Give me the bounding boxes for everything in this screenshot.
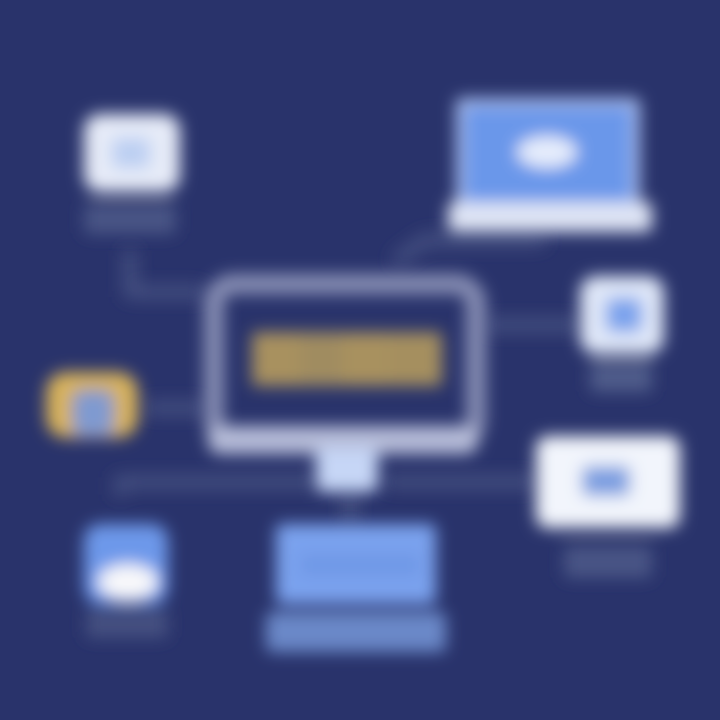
caption placeholder bbox=[84, 204, 176, 234]
caption placeholder bbox=[86, 610, 168, 638]
caption placeholder bbox=[590, 362, 652, 392]
central monitor bbox=[208, 284, 478, 492]
monitor stand bbox=[316, 448, 378, 492]
monitor bottom bezel bbox=[208, 426, 478, 454]
icon: bottom-left device bbox=[84, 524, 168, 638]
caption placeholder bbox=[564, 546, 652, 578]
gold label block bbox=[252, 332, 442, 386]
icon: top-right laptop bbox=[448, 98, 652, 232]
icon: right wide device bbox=[536, 436, 680, 578]
monitor frame bbox=[214, 284, 476, 440]
icon: right device bbox=[580, 276, 664, 392]
icon: top-left device bbox=[84, 114, 180, 234]
connector lines bbox=[120, 240, 580, 525]
icon: left gold device bbox=[46, 372, 138, 438]
icon: bottom laptop bbox=[266, 524, 446, 652]
